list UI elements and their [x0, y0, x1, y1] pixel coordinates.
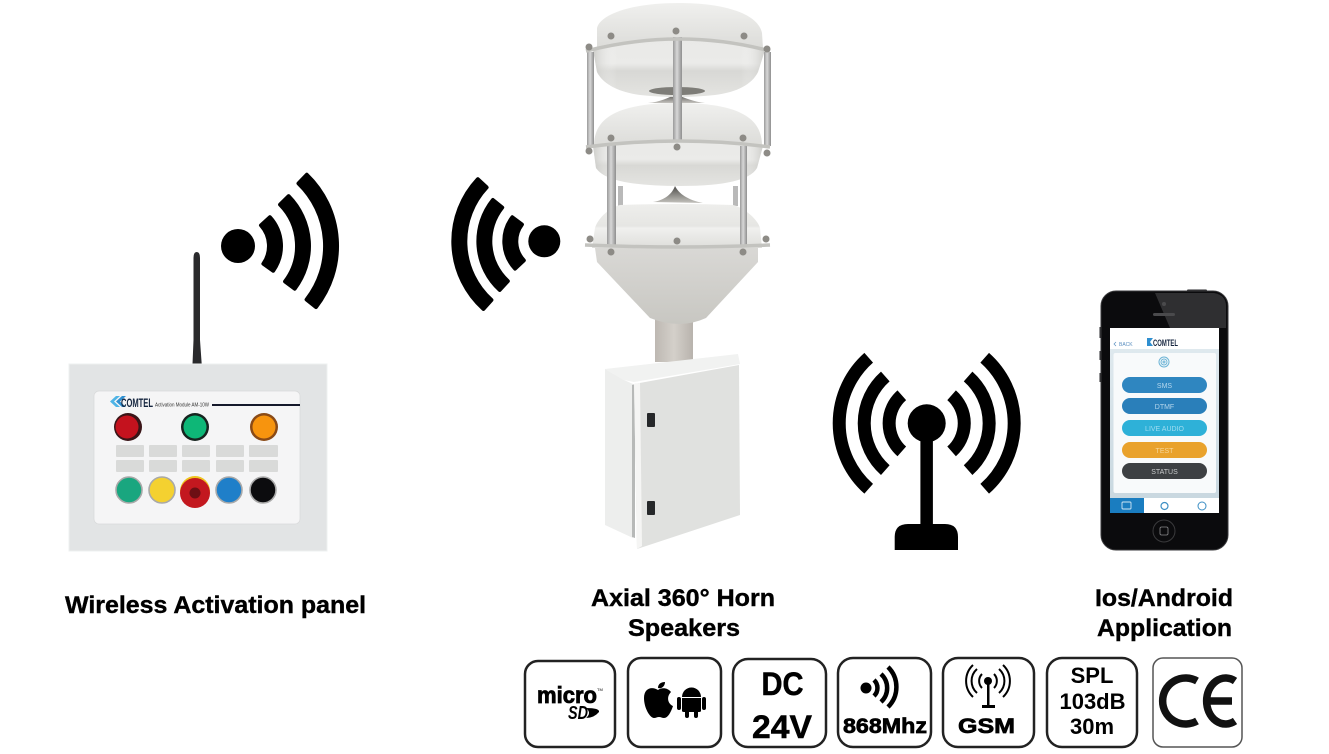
badge: 868Mhz: [838, 658, 931, 747]
icon: apple: [644, 682, 673, 718]
badge: SPL 103dB 30m: SPL: [1071, 663, 1113, 688]
target icon: [1159, 357, 1169, 367]
label windows: [116, 445, 278, 472]
badge: GSM: [943, 658, 1034, 747]
card content: [1114, 353, 1216, 493]
label: iOS and Android application: Ios/Android: [1095, 585, 1233, 612]
label: wireless activation panel: Wireless Activation panel: [65, 592, 366, 619]
app header: COMTEL: [1153, 338, 1178, 348]
panel: wireless activation panel: [69, 252, 327, 551]
icon: wireless signal to speakers: [453, 179, 560, 309]
throat: [649, 87, 705, 95]
faceplate: [94, 391, 300, 524]
bolts: [586, 28, 770, 256]
badge: DC 24V: 24V: [752, 709, 813, 745]
app buttons: SMS: [1157, 383, 1172, 390]
panel logo: COMTEL: [121, 398, 153, 410]
badge: CE mark: [1153, 658, 1242, 747]
app buttons: [1122, 377, 1207, 479]
badge: microSD: [525, 661, 615, 747]
badge: SPL 103dB 30m: [1047, 658, 1137, 747]
back post: [733, 186, 738, 206]
badge: SPL 103dB 30m: 103dB: [1059, 689, 1126, 714]
label: axial horn speakers: [591, 585, 775, 642]
badge: SPL 103dB 30m: 30m: [1070, 714, 1114, 739]
push buttons: [116, 476, 276, 508]
badge: GSM: GSM: [958, 715, 1015, 738]
lower posts: [618, 186, 623, 206]
smartphone app: [1100, 290, 1228, 550]
label: axial horn speakers: Speakers: [628, 615, 740, 642]
latches: [647, 413, 655, 427]
top bowl: [593, 39, 765, 97]
rods: [587, 37, 771, 246]
home button: [1153, 520, 1175, 542]
second cap: [594, 103, 762, 146]
earpiece and camera: [1153, 302, 1175, 316]
top cap: [597, 3, 763, 48]
label: iOS and Android application: [1095, 585, 1233, 642]
badge: microSD: SD: [568, 703, 588, 723]
icon: android: [677, 688, 706, 718]
app buttons: DTMF: [1155, 404, 1174, 411]
third speaker unit: [592, 204, 762, 248]
lower cone diffuser: [653, 186, 703, 203]
second bowl: [593, 140, 763, 186]
app header: [1114, 338, 1178, 348]
phone body: [1101, 291, 1228, 550]
badge: DC 24V: [733, 659, 826, 747]
badge: Apple and Android: [628, 658, 721, 747]
horn cone: [595, 248, 758, 324]
label: iOS and Android application: Application: [1097, 615, 1232, 642]
icon: GSM radio tower: [839, 358, 1014, 550]
speaker assembly: [585, 3, 771, 549]
app menu card: [1110, 349, 1219, 498]
panel logo: Activation Module AM-10W: [155, 402, 209, 408]
panel housing: [69, 364, 327, 551]
icon: wireless signal from activation panel: [221, 175, 337, 307]
enclosure box: [605, 354, 740, 549]
second bowl shading: [593, 140, 763, 186]
badge: microSD: micro: [537, 682, 597, 708]
top bowl shading: [593, 39, 765, 97]
glass reflection: [1155, 293, 1226, 328]
panel logo: [110, 396, 300, 410]
tab bar: [1110, 498, 1219, 513]
clamp rings: [585, 39, 770, 247]
indicator lights: [114, 413, 278, 441]
side buttons: [1100, 290, 1207, 382]
label: axial horn speakers: Axial 360° Horn: [591, 585, 775, 612]
badge: microSD: TM: [597, 687, 603, 692]
app buttons: LIVE AUDIO: [1145, 426, 1185, 433]
screen: [1110, 328, 1219, 513]
app header: BACK: [1119, 342, 1133, 348]
upper diffuser: [648, 94, 705, 103]
antenna: [192, 252, 202, 364]
pole: [655, 318, 693, 362]
app buttons: STATUS: [1151, 469, 1178, 476]
badge: DC 24V: DC: [762, 666, 804, 702]
app buttons: TEST: [1156, 448, 1174, 455]
badge: 868Mhz: 868Mhz: [843, 715, 927, 738]
